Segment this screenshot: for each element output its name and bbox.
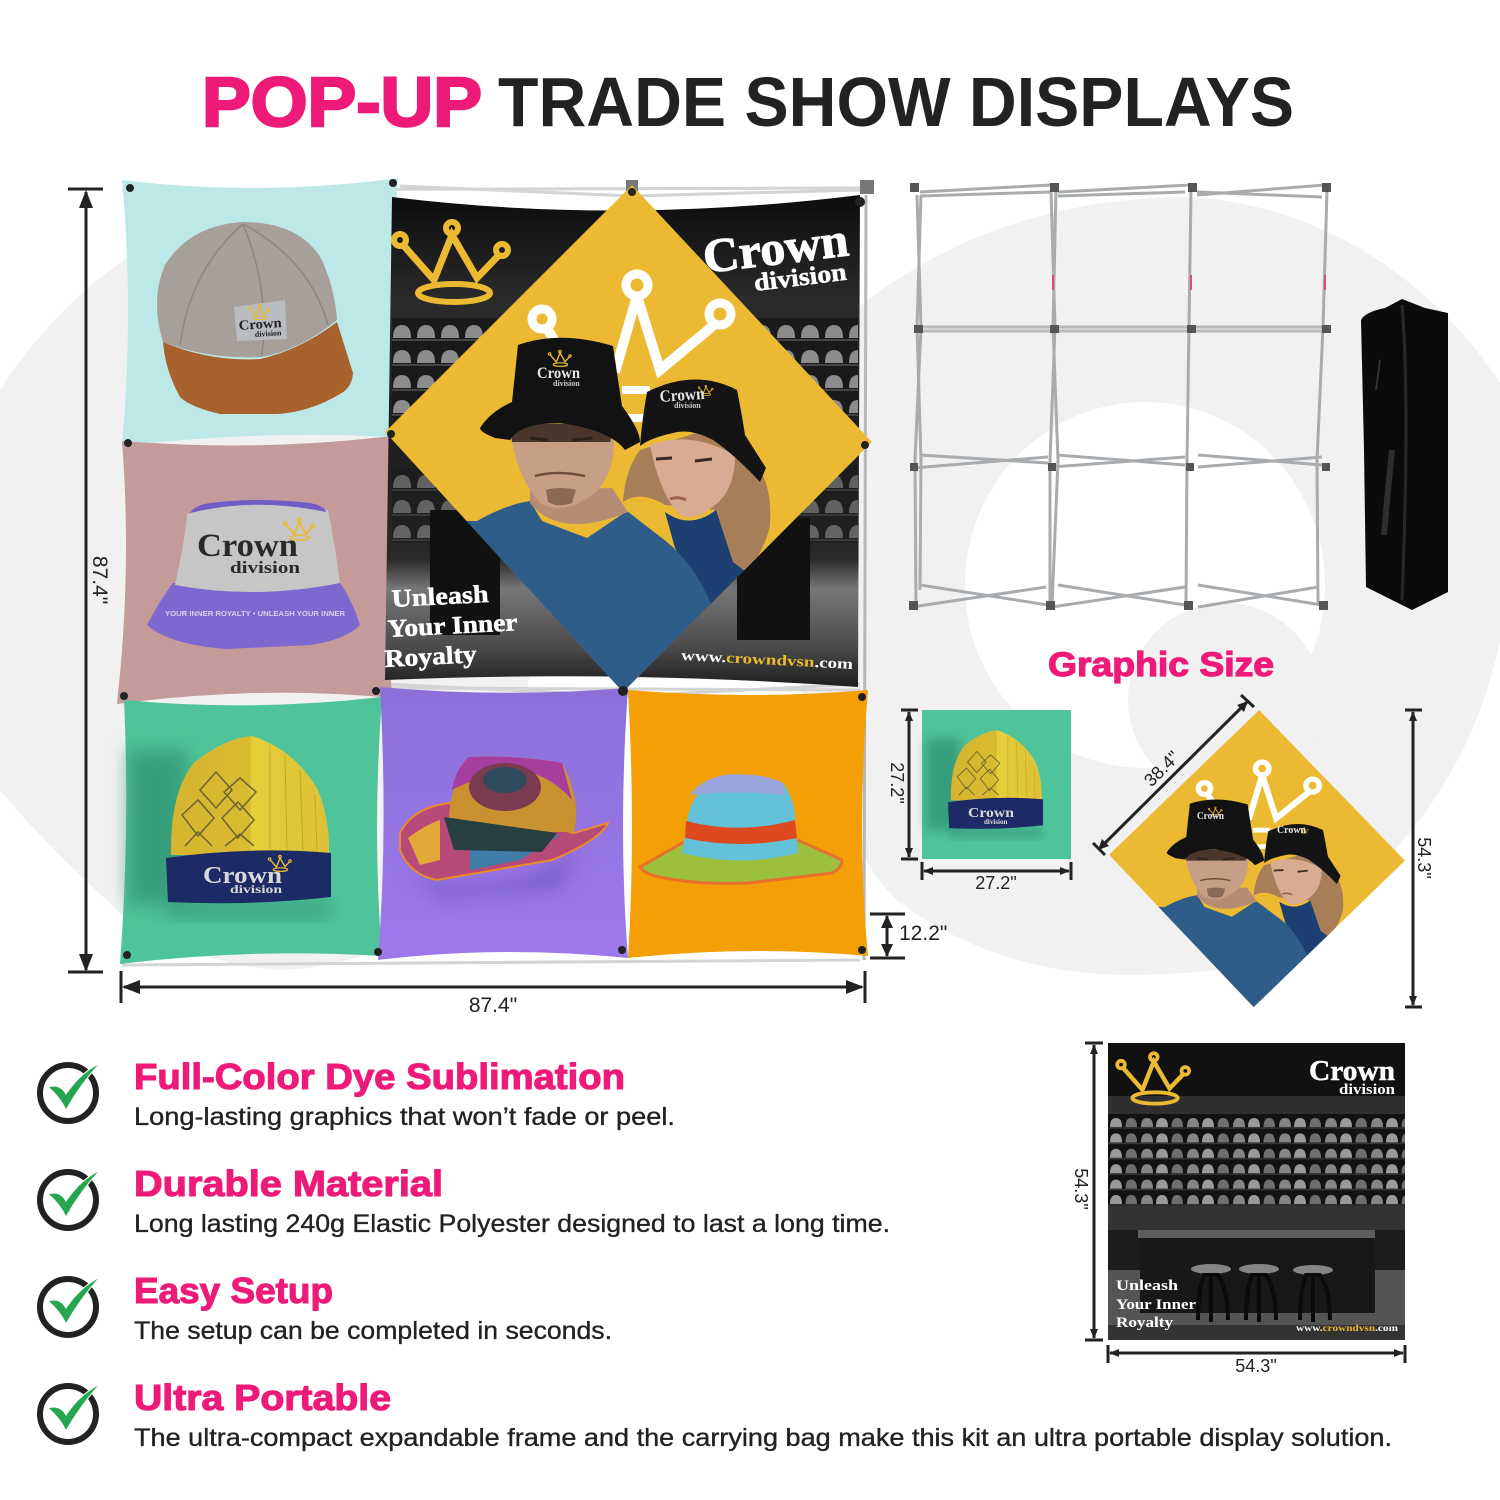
dimension: diamond height: 54.3" xyxy=(1414,837,1434,879)
panel: yellow diamond with couple xyxy=(385,185,872,702)
heading: graphic size: Graphic Size xyxy=(1048,646,1274,684)
panel: small green graphic: Crown xyxy=(968,806,1014,821)
backdrop website: www. crowndvsn .com xyxy=(681,648,854,673)
panel: small green graphic xyxy=(922,710,1071,859)
panel: full backdrop graphic: Crown xyxy=(1309,1055,1395,1087)
icon: purple bucket hat xyxy=(147,500,360,649)
backdrop slogan: Your Inner xyxy=(387,609,518,643)
icon: purple bucket hat: division xyxy=(230,558,301,577)
panel: small diamond graphic xyxy=(1109,710,1405,1013)
icon: yellow beanie xyxy=(128,736,331,918)
feature: easy setup xyxy=(40,1270,612,1345)
feature: ultra portable xyxy=(40,1377,1392,1452)
title xyxy=(202,63,1294,141)
icon: striped fedora xyxy=(400,757,608,900)
panel: yellow diamond with couple: division xyxy=(674,401,701,410)
stools xyxy=(1191,1264,1333,1322)
dimension: small panel height: 27.2" xyxy=(887,762,907,804)
panel: green beanie graphic xyxy=(120,697,382,964)
icon: check xyxy=(40,1384,100,1442)
dimension: small panel width: 27.2" xyxy=(975,873,1017,893)
dimension: diamond edge xyxy=(1093,695,1254,855)
backdrop slogan: Royalty xyxy=(384,641,478,673)
panel: small diamond graphic: Crown xyxy=(1277,824,1306,836)
icon: yellow beanie: division xyxy=(230,882,282,896)
feature: full-color dye sublimation xyxy=(40,1056,675,1131)
dimension: diamond height xyxy=(1405,710,1434,1007)
dimension: small panel width xyxy=(922,862,1071,893)
icon: check xyxy=(40,1277,100,1335)
panel: small green graphic: division xyxy=(984,818,1007,826)
panel: yellow diamond with couple: Crown xyxy=(537,365,580,382)
feature: full-color dye sublimation: Full-Color Dye Sublimation xyxy=(134,1056,625,1097)
panel: purple fedora graphic xyxy=(378,687,628,960)
panel: full backdrop graphic: Unleash xyxy=(1116,1278,1179,1294)
title: POP-UP xyxy=(202,63,482,141)
feature: durable material xyxy=(40,1163,890,1238)
panel: yellow diamond with couple: Crown xyxy=(659,384,706,406)
icon: check xyxy=(40,1170,100,1228)
backdrop brand text: division xyxy=(752,259,848,297)
dimension: display height xyxy=(68,189,111,972)
dimension: display width xyxy=(121,971,865,1017)
feature: durable material: Long lasting 240g Elastic Polyester designed to last a long time. xyxy=(134,1210,890,1238)
panel: mint cap graphic xyxy=(122,178,398,446)
title: TRADE SHOW DISPLAYS xyxy=(498,63,1294,141)
feature: ultra portable: Ultra Portable xyxy=(134,1377,391,1418)
dimension: backdrop height: 54.3" xyxy=(1071,1168,1091,1210)
panel: full backdrop graphic: division xyxy=(1339,1082,1396,1098)
panel: yellow diamond with couple: division xyxy=(553,379,580,388)
icon: colorful brim hat xyxy=(640,774,842,883)
grommets xyxy=(120,179,869,959)
dimension: backdrop height xyxy=(1071,1043,1103,1340)
feature: ultra portable: The ultra-compact expandable frame and the carrying bag make this kit an ultra portable display solution. xyxy=(134,1424,1392,1452)
icon: purple bucket hat: YOUR INNER ROYALTY • UNLEASH YOUR INNER xyxy=(165,611,345,618)
icon: yellow beanie: Crown xyxy=(203,863,282,889)
feature: easy setup: The setup can be completed in seconds. xyxy=(134,1317,612,1345)
backdrop slogan: Unleash xyxy=(391,581,489,613)
dimension: diamond edge: 38.4" xyxy=(1140,747,1183,790)
feature: easy setup: Easy Setup xyxy=(134,1270,333,1311)
panel: full backdrop graphic: Your Inner xyxy=(1116,1297,1196,1313)
carrying bag xyxy=(1361,299,1448,610)
background swirl xyxy=(0,197,1500,975)
icon: grey and brown cap xyxy=(157,222,353,414)
dimension: display height: 87.4" xyxy=(88,556,111,604)
dimension: display width: 87.4" xyxy=(469,994,517,1017)
icon: grey and brown cap: Crown xyxy=(238,316,282,334)
frame behind display xyxy=(122,180,874,965)
panel: full backdrop graphic: www. crowndvsn .com xyxy=(1296,1324,1398,1334)
panel: orange hat graphic xyxy=(628,690,868,958)
dimension: backdrop width xyxy=(1108,1345,1405,1376)
dimension: backdrop width: 54.3" xyxy=(1235,1356,1277,1376)
backdrop slogan xyxy=(384,581,518,673)
panel: full backdrop graphic: Royalty xyxy=(1116,1315,1174,1331)
dimension: overlap xyxy=(870,914,947,958)
feature: full-color dye sublimation: Long-lasting graphics that won’t fade or peel. xyxy=(134,1103,675,1131)
panel: black backdrop graphic xyxy=(384,195,860,687)
panel: small diamond graphic: Crown xyxy=(1197,810,1224,822)
feature: durable material: Durable Material xyxy=(134,1163,443,1204)
icon: check xyxy=(40,1063,100,1121)
crown logo xyxy=(394,222,508,302)
frame xyxy=(909,183,1331,610)
dimension: overlap: 12.2" xyxy=(899,922,947,945)
panel: full backdrop graphic xyxy=(1108,1043,1405,1340)
backdrop brand text: Crown xyxy=(700,214,851,284)
icon: purple bucket hat: Crown xyxy=(197,528,298,564)
icon: grey and brown cap: division xyxy=(255,328,282,339)
dimension: small panel height xyxy=(887,710,918,859)
panel: rose bucket hat graphic xyxy=(117,436,392,704)
crown logo xyxy=(1117,1053,1189,1104)
